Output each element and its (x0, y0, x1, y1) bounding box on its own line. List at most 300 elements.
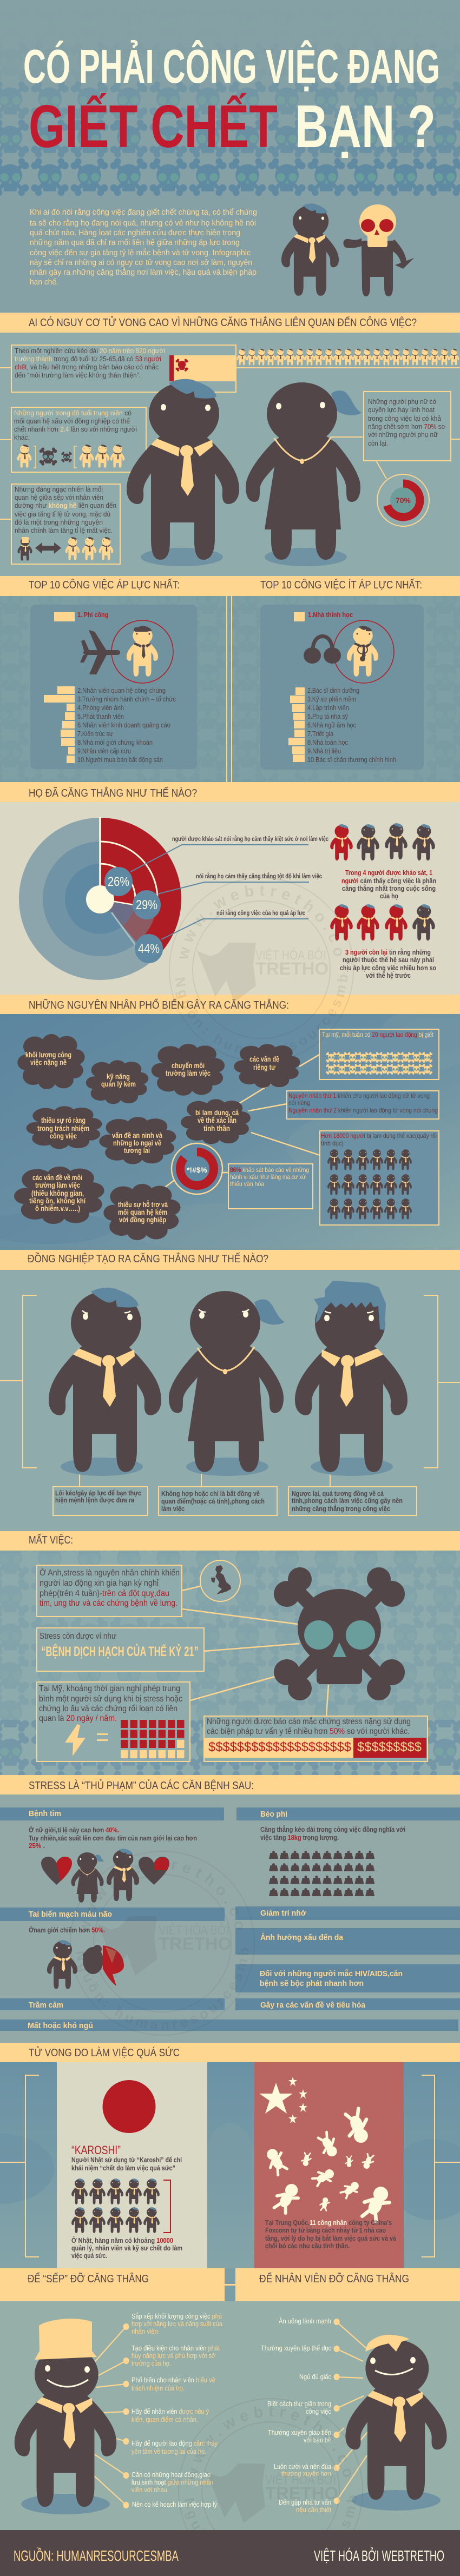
intro text: công việc đến sự gia tăng tỷ lệ mắc bệnh và tử vong. Infographic (30, 248, 251, 257)
figure: woman (246, 382, 362, 560)
disease: heart: 25% . (29, 1842, 45, 1850)
bars and list: least stressful: 5.Phụ tá nha sỹ (307, 712, 348, 720)
box: similarity: Ngược lại, quá tương đồng về cá (292, 1490, 384, 1498)
figure: boss (15, 2319, 116, 2507)
box: plague of the 21st century: Stress còn được ví như (40, 1632, 116, 1641)
box: 86%: thiếu văn hóa (230, 1180, 264, 1188)
tips for employees: thường xuyên hơn (281, 2469, 331, 2478)
disease: skin: Ảnh hưởng xấu đến da (260, 1933, 344, 1942)
watermark stamp 2 (70, 1851, 255, 2036)
bars and list: least stressful: 4.Lập trình viên (307, 704, 349, 712)
figure: office worker (281, 203, 339, 296)
bars and list: least stressful: 10.Bác sĩ chấn thương chỉnh hình (307, 756, 396, 764)
disease: heart (0, 1807, 224, 1903)
box: disagreement (159, 1487, 277, 1515)
heading band: diseases: STRESS LÀ “THỦ PHẠM” CỦA CÁC CĂN BỆNH SAU: (29, 1779, 254, 1792)
heading band: top 10: TOP 10 CÔNG VIỆC ÁP LỰC NHẤT: (29, 579, 180, 591)
tips for bosses: lưu,sinh hoạt giữa những nhân (132, 2478, 213, 2486)
panel: coworkers (0, 1250, 460, 1531)
panel: Japan karoshi: quản lý, nhân viên và kỹ sư chết do làm (71, 2244, 182, 2252)
intro text: những năm qua đã chỉ ra mối liên hệ giữa những áp lực trong (30, 239, 240, 247)
disease: HIV (235, 1964, 460, 1992)
box: UK: phép(trên 4 tuần)-trên cả đột quỵ,đau (40, 1589, 169, 1598)
bars and list: least stressful: 6.Nhà ngữ âm học (307, 721, 356, 729)
cloud: role clarity: công việc (50, 1132, 77, 1140)
chart: 20 day grid (121, 1720, 184, 1758)
tips for employees: Đến gặp nhà tư vấn (279, 2498, 331, 2506)
shadows (61, 1458, 393, 1476)
footer (0, 2530, 460, 2576)
heading band: causes (0, 995, 460, 1014)
tips for bosses: Phổ biến cho nhân viên hiểu về (132, 2376, 215, 2384)
box: UK (37, 1565, 182, 1617)
tips for employees: Thường xuyên giao tiếp (268, 2428, 331, 2436)
panel: top 10 jobs (0, 576, 460, 782)
callout: middle aged colleagues: chết nhanh hơn 2.4 lần so với những người (14, 426, 137, 433)
intro text: này sẽ chỉ ra những ai có nguy cơ tử vong cao nơi sở làm, nguyên (30, 259, 252, 267)
tips for bosses: trường của họ. (132, 2359, 171, 2367)
panel: Japan karoshi: khái niệm “chết do làm việc quá sức” (71, 2164, 175, 2172)
bars and list: stressful: 4.Phóng viên ảnh (77, 704, 124, 712)
tips for employees: nếu cần thiết (296, 2506, 331, 2514)
cloud: poor support (103, 1184, 180, 1240)
cloud: job security: vấn đề an ninh và (112, 1131, 162, 1140)
box: leading cause: Nguyên nhân thứ 1 khiến cho người lao động nữ tử vong (288, 1092, 430, 1100)
panel: Japan karoshi: Ở Nhật, hàng năm có khoảng 10000 (71, 2236, 173, 2244)
callout: boss relation (11, 484, 120, 564)
stat: 29%: 29% (136, 898, 157, 912)
callout: women with power: quyền lực hay linh hoạt (368, 406, 435, 414)
figure: similar coworker (295, 1281, 408, 1472)
box: US leave: bình một người sử dụng khi bị stress hoặc (39, 1694, 182, 1704)
bars and list: stressful: 10.Người mua bán bất động sản (77, 756, 163, 764)
tips for bosses: huy năng lực và phù hợp với sở (132, 2352, 215, 2360)
box: plague of the 21st century (37, 1628, 204, 1671)
cloud: environment problems: tiếng ồn, không khí (29, 1197, 86, 1205)
panel: China Foxconn (254, 2062, 404, 2268)
intro text: nhân gây ra những căng thẳng nơi làm việc, hậu quả và biện pháp (30, 267, 257, 277)
text: 3 of 4: với thế hệ trước (366, 971, 411, 979)
cloud: abuse: tinh thần (203, 1124, 230, 1133)
disease: insomnia: Mất hoặc khó ngủ (28, 2021, 93, 2030)
panel: most stressful jobs (30, 605, 197, 769)
bars and list: stressful: 6.Nhân viên kinh doanh quảng cáo (77, 721, 170, 729)
heading: employees: ĐỂ NHÂN VIÊN ĐỠ CĂNG THẲNG (259, 2272, 409, 2285)
bars and list: stressful: 7.Kiến trúc sư (77, 730, 113, 738)
cloud: job security (99, 1117, 176, 1164)
callout: 20 year study: Theo một nghiên cứu kéo dài 20 năm trên 820 người (15, 347, 165, 355)
callout: women with power: với những người phụ nữ (368, 431, 438, 439)
cloud: personal issues (234, 1044, 300, 1088)
chart labels: nói rằng công việc của họ quá áp lực (216, 910, 305, 917)
figures: 1 of 4 (330, 823, 435, 860)
box: similarity: những căng thẳng trong công việc (292, 1505, 390, 1513)
panel: least stressful jobs: 1.Nhà thính học (308, 611, 353, 619)
box: medical costs: Những người được báo cáo mắc chứng stress nặng sử dụng (207, 1717, 411, 1726)
heading band: how stressed: HỌ ĐÃ CĂNG THẲNG NHƯ THẾ NÀO? (29, 786, 197, 799)
chart labels (172, 836, 328, 917)
chart labels: người được khảo sát nói rằng họ cảm thấy kiệt sức ở nơi làm việc (172, 836, 328, 843)
panel: stress related diseases (0, 1775, 460, 2043)
heading band: job loss: MẤT VIỆC: (29, 1534, 73, 1546)
disease: digestion (235, 1998, 460, 2010)
panel: Japan karoshi (57, 2062, 207, 2268)
disease: stroke (0, 1908, 225, 1989)
heading band: top 10: TOP 10 CÔNG VIỆC ÍT ÁP LỰC NHẤT: (260, 579, 422, 591)
tips for bosses: Hãy để nhân viên được nêu ý (132, 2407, 209, 2415)
disease: obesity (236, 1807, 460, 1896)
watermark stamp 3: VIỆT HÓA BỞI (265, 2472, 336, 2487)
box: pressure (53, 1487, 148, 1515)
tips for bosses: trách nhiệm của họ. (132, 2384, 185, 2392)
callout: women with power: năng chết sớm hơn 70% so (368, 423, 445, 431)
callout: boss relation: đó là một trong những nguyên (15, 519, 103, 526)
watermark stamp 1: www.webtretho.com (180, 885, 342, 958)
box: leading cause: Nguyên nhân thứ 2 khiến người lao động tử vong nói chung (288, 1107, 438, 1114)
figures: 3 of 4 (330, 904, 435, 941)
cloud: management: kỹ năng (107, 1072, 130, 1081)
panel: Japan karoshi: “KAROSHI” (71, 2143, 121, 2157)
watermark stamp 1: Nguồn: humanresourcesmba (175, 975, 347, 1056)
box: 18000 assaulted (320, 1131, 439, 1225)
watermark stamp 2: www.webtretho.com (80, 1859, 243, 1932)
box: medical costs: $$$$$$$$$$$$$$$$$$$$ (208, 1740, 351, 1754)
icon: brain (83, 1945, 124, 1986)
icon: UK map (200, 1560, 240, 1601)
icon: flag stars (259, 2077, 307, 2123)
callout: 20 year study: trưởng thành trong độ tuổi từ 25-65,đã có 53 người (15, 355, 161, 363)
panel: common causes (0, 995, 460, 1252)
donut: 86% (172, 1143, 222, 1194)
disease: skin (235, 1928, 460, 1955)
bars and list: least stressful: 3.Kỹ sư phần mềm (307, 695, 356, 703)
intro text: Khi ai đó nói rằng công việc đang giết chết chúng ta, có thể chúng (30, 208, 257, 217)
icon: audiologist (347, 626, 378, 677)
panel: most stressful jobs: 1. Phi công (77, 611, 108, 619)
callout: middle aged colleagues: mối quan hệ xấu với đồng nghiệp có thể (14, 418, 130, 425)
panel: Japan karoshi: Người Nhật sử dụng từ “Karoshi” để chỉ (71, 2156, 182, 2164)
box: disagreement: quan điểm(hoặc cá tính),phong cách (161, 1498, 265, 1505)
donut: 86%: *!#$% (187, 1166, 208, 1174)
bars and list: least stressful (288, 686, 396, 764)
tips for bosses: viên với nhau. (132, 2486, 169, 2494)
watermark stamp 2: VIỆT HÓA BỞI (159, 1922, 229, 1938)
text: 3 of 4: 3 người còn lại tin rằng những (345, 948, 431, 956)
tips for bosses: Sắp xếp khối lượng công việc phù (132, 2312, 222, 2320)
box: 86%: hành vi xấu như lăng mạ,cư xử (230, 1173, 306, 1181)
stat: 26% (104, 867, 133, 896)
intro text: hạn chế. (30, 278, 58, 287)
heading band: coworkers: ĐỒNG NGHIỆP TẠO RA CĂNG THẲNG NHƯ THẾ NÀO? (28, 1252, 268, 1265)
panel: China Foxconn: Tại Trung Quốc,11 công nhân công ty China's (265, 2219, 392, 2227)
cloud: job security: tương lai (124, 1147, 150, 1155)
bars and list: least stressful: 8.Nhà toán học (307, 738, 348, 746)
cloud: role clarity: trong trách nhiệm (37, 1124, 89, 1133)
watermark stamp 3: www.webtretho.com (188, 2406, 351, 2479)
bars and list: least stressful: 7.Triết gia (307, 730, 334, 738)
figure: happy employee (345, 2335, 447, 2500)
watermark stamp 1: VIỆT HÓA BỞI (255, 947, 326, 963)
box: US leave: chứng lo âu và các chứng rối loạn có liên (39, 1704, 178, 1713)
heading: boss (0, 2268, 225, 2301)
cloud: personal issues: riêng tư (253, 1063, 275, 1071)
box: 86%: 86% khảo sát báo cáo về những (230, 1166, 309, 1174)
icon: heart male (139, 1857, 169, 1885)
heading band: how stressed (0, 782, 460, 802)
box: pressure: hiện mệnh lệnh được đưa ra (55, 1496, 135, 1504)
watermark stamp 2: Nguồn: humanresourcesmba (76, 1948, 249, 2030)
cloud: abuse: bị lạm dụng, cả (195, 1109, 239, 1117)
panel: least stressful jobs (260, 605, 424, 770)
disease: obesity: Căng thẳng kéo dài trong công việc đồng nghĩa với (260, 1825, 405, 1833)
donut: 70% (377, 474, 429, 526)
callout: 20 year study: chết, và hầu hết trong những bản báo cáo có nhắc (15, 363, 159, 371)
cloud: environment problems: (thiếu không gian, (31, 1189, 84, 1197)
callout: boss relation: việc gia tăng tỉ lệ tử vong, mặc dù (15, 511, 110, 518)
box: medical costs: các biện pháp tư vấn y tế nhiều hơn 50% so với người khác. (207, 1727, 410, 1736)
box: similarity: tính,phong cách làm việc cũng gây nên (292, 1497, 403, 1505)
cloud: changing environment: chuyển môi (172, 1062, 205, 1070)
chart labels: nói rằng họ cảm thấy căng thẳng tột độ khi làm việc (196, 873, 322, 880)
box: US leave (37, 1682, 190, 1762)
callout: women with power (364, 392, 451, 461)
cloud: environment problems: trường làm việc (35, 1181, 80, 1189)
callout: boss relation: dường như không hề liên quan đến (15, 502, 116, 509)
box: disagreement: Không hợp hoặc chỉ là bất đồng về (161, 1490, 260, 1498)
tips for employees: Ngủ đủ giấc (299, 2373, 331, 2381)
figure: disagreeing coworker (169, 1291, 285, 1472)
text: 1 of 4: người cảm thấy công việc là phần (341, 877, 436, 885)
callout: middle aged colleagues (11, 407, 146, 472)
heading band: overwork: TỬ VONG DO LÀM VIỆC QUÁ SỨC (29, 2046, 180, 2059)
bars and list: stressful: 5.Phát thanh viên (77, 712, 124, 720)
disease: obesity: Béo phì (260, 1810, 287, 1819)
icon: headphones (304, 636, 341, 664)
tips for bosses: Nên có kế hoạch làm việc hợp lý. (132, 2500, 219, 2508)
disease: heart: Tuy nhiên,xác suất lên cơn đau tim của nam giới lại cao hơn (29, 1834, 197, 1842)
bars and list: least stressful: 2.Bác sĩ dinh dưỡng (307, 686, 359, 694)
radial chart (19, 817, 181, 980)
cloud: changing environment (152, 1044, 225, 1096)
box: medical costs: $$$$$$$$$ (357, 1740, 422, 1754)
tips for employees: với bạn bè (304, 2436, 331, 2444)
cloud: role clarity (26, 1106, 102, 1149)
panel: relieving stress (0, 2268, 460, 2530)
heading: boss: ĐỂ “SẾP” ĐỠ CĂNG THẲNG (28, 2272, 149, 2285)
shadows (21, 2490, 441, 2514)
callout: boss relation: quan hệ giữa sếp với nhân viên (15, 494, 103, 501)
callout: women with power: còn lại. (368, 440, 388, 447)
icon: falling people (262, 2107, 394, 2224)
panel: China Foxconn: Foxconn tự tử bằng cách nhảy từ 1 nhà cao (265, 2226, 386, 2234)
tips for bosses: kiến, quan điểm cá nhân. (132, 2415, 198, 2423)
cloud: poor support: thiếu sự hỗ trợ và (118, 1201, 168, 1209)
callout: 20 year study (11, 345, 236, 392)
heading band: who is at risk (0, 313, 460, 333)
disease: depression (0, 1998, 225, 2010)
tips for bosses: Cần có những hoạt động,giao (132, 2471, 211, 2479)
people row (237, 349, 459, 365)
figure: skull reaper with knife (343, 204, 414, 296)
cloud: management (86, 1060, 148, 1104)
box: leading cause (287, 1091, 439, 1119)
panel: China Foxconn: chối bỏ các nhu cầu tinh thần. (265, 2242, 350, 2250)
stat: 29% (133, 890, 161, 919)
box: medical costs (204, 1716, 428, 1762)
callout: boss relation: nhân chính làm tăng tỉ lệ mất việc. (15, 527, 113, 534)
cloud: abuse: về thể xác lẫn (198, 1116, 236, 1124)
bars and list: stressful: 3.Trưởng nhóm hành chính – tổ chức (77, 695, 176, 703)
cloud: poor support: với đồng nghiệp (119, 1216, 166, 1224)
cloud: management: quản lý kém (101, 1080, 136, 1088)
watermark stamp 2: TRETHO (159, 1934, 232, 1953)
disease: HIV: bệnh sẽ bộc phát nhanh hơn (260, 1979, 364, 1988)
footer: NGUỒN: HUMANRESOURCESMBA (14, 2547, 179, 2564)
cloud: workload: việc nặng nề (30, 1058, 67, 1067)
bars and list: stressful: 8.Nhà môi giới chứng khoán (77, 738, 153, 746)
cloud: workload: khối lượng công (25, 1051, 71, 1059)
callout lines (130, 845, 309, 939)
disease: stroke: Ởnam giới chiếm hơn 50%. (29, 1926, 105, 1934)
box: US leave: Tại Mỹ, khoảng thời gian nghỉ phép trung (39, 1684, 180, 1693)
cloud: environment problems: các vấn đề về môi (32, 1174, 82, 1182)
callout: women with power: Những người phụ nữ có (368, 398, 436, 406)
panel: China Foxconn: tầng, với lý do họ bị bắt làm việc quá sức và và (265, 2234, 397, 2242)
panel: job loss (0, 1531, 460, 1775)
shadows (141, 548, 347, 566)
icon: heart female (41, 1857, 72, 1885)
tips for bosses: Hãy để người lao động cảm thấy (132, 2439, 218, 2447)
icon: plane (80, 630, 120, 674)
heading band: overwork (0, 2043, 460, 2062)
tips for employees: Biết cách thư giãn trong (267, 2400, 331, 2408)
disease: digestion: Gây ra các vấn đề về tiêu hóa (260, 2001, 366, 2010)
disease: depression: Trầm cảm (29, 2001, 63, 2010)
tips for bosses: nhân viên. (132, 2327, 160, 2335)
stat: 44% (135, 934, 163, 963)
disease: obesity: việc tăng 18kg trọng lượng. (260, 1833, 339, 1842)
intro text (30, 208, 257, 287)
callout: middle aged colleagues: Những người trong độ tuổi trung niên có (14, 409, 132, 417)
cloud: role clarity: thiếu sự rõ ràng (41, 1116, 86, 1124)
box: US leave: quan là 20 ngày / năm. (39, 1714, 117, 1723)
figure: pressuring coworker (49, 1288, 161, 1472)
callout: boss relation: Nhưng đáng ngạc nhiên là mối (15, 486, 103, 493)
disease: insomnia (0, 2019, 458, 2031)
box: UK: người lao động xin gia hạn kỳ nghỉ (40, 1579, 159, 1588)
disease: memory: Giảm trí nhớ (260, 1909, 306, 1918)
heading band: diseases (0, 1775, 460, 1794)
box: killed each week (319, 1029, 439, 1080)
text: 3 of 4 (340, 948, 436, 979)
box: similarity (288, 1487, 417, 1515)
tips for bosses: Tạo điều kiện cho nhân viên phát (132, 2344, 220, 2352)
background: hero (0, 0, 460, 313)
cloud: job security: những lo ngại về (113, 1139, 161, 1147)
text: 1 of 4: của họ (380, 892, 398, 900)
tips for bosses: hợp với năng lực và năng suất của (132, 2320, 223, 2328)
heading: employees (235, 2268, 460, 2301)
cloud: environment problems (14, 1167, 104, 1224)
box: pressure: Lôi kéo/gây áp lực để bạn thực (55, 1489, 141, 1497)
tips for employees: Thường xuyên tập thể dục (261, 2344, 331, 2352)
box: killed each week: Tại mỹ, mỗi tuần có 20 người lao động bị giết (322, 1030, 434, 1038)
watermark stamp 1: TRETHO (255, 959, 328, 978)
watermark stamp 3 (178, 2398, 363, 2564)
heading band: job loss (0, 1531, 460, 1551)
intro text: quá chút nào. Hàng loạt các nghiên cứu được thực hiện trong (30, 229, 240, 237)
text: 1 of 4 (341, 869, 436, 900)
callout: women with power: trong công việc lại có khả (368, 415, 441, 422)
disease: stroke: Tai biến mạch máu não (29, 1910, 112, 1919)
skull pattern: hero (0, 4, 460, 196)
callout: middle aged colleagues: khác. (14, 434, 30, 441)
cloud: workload (17, 1034, 85, 1089)
tips for employees: Luôn cười và nên đùa (274, 2462, 332, 2471)
disease: heart: Bệnh tim (29, 1809, 61, 1818)
box: 18000 assaulted: tình dục) (321, 1140, 344, 1147)
stat: 26%: 26% (108, 875, 129, 889)
bars and list: stressful (44, 686, 176, 764)
panel: how stressed (0, 782, 460, 995)
figure: man (127, 379, 239, 560)
cloud: personal issues: các vấn đề (249, 1055, 279, 1063)
watermark stamp 1 (169, 877, 354, 1062)
title: GIẾT CHẾT (29, 93, 278, 160)
heading band: coworkers (0, 1250, 460, 1270)
box: leading cause: nói riêng (288, 1099, 310, 1107)
text: 1 of 4: Trong 4 người được khảo sát, 1 (345, 869, 432, 877)
text: 3 of 4: người thuộc thế hệ sau này phải (343, 956, 434, 964)
icon: pilot (127, 626, 158, 677)
intro text: ta sẽ cho rằng họ đang nói quá, nhưng có vẻ như họ không hề nói (30, 218, 256, 228)
heading band: top 10 (0, 576, 460, 596)
stat: 44%: 44% (138, 942, 160, 956)
box: 86% (228, 1164, 313, 1209)
cloud: poor support: mối quan hệ kém (118, 1208, 167, 1216)
box: UK: tim, ung thư và các chứng bệnh về lưng. (40, 1599, 178, 1608)
callout: 20 year study: đến “môi trường làm việc không thân thiện”. (15, 372, 141, 379)
cloud: abuse (181, 1099, 251, 1144)
disease: heart: Ở nữ giới,tỉ lệ này cao hơn 40%. (29, 1826, 119, 1834)
cloud: environment problems: ô nhiễm.v.v…..) (35, 1204, 80, 1213)
tips for employees: công việc (306, 2407, 331, 2415)
cloud: changing environment: trường làm việc (166, 1069, 211, 1077)
panel: who is at risk (0, 313, 460, 576)
box: disagreement: làm việc (161, 1505, 185, 1513)
tips for employees: Ăn uống lành mạnh (279, 2317, 331, 2325)
bars and list: stressful: 9.Nhân viên cấp cứu (77, 747, 131, 755)
tips for bosses: yên tâm về tương lai của họ. (132, 2447, 206, 2455)
text: 3 of 4: chịu áp lực công việc nhiều hơn so (340, 964, 436, 972)
bars and list: stressful: 2.Nhân viên quan hệ công chúng (77, 686, 166, 694)
tips for bosses (123, 2312, 223, 2508)
tips for employees (261, 2317, 340, 2514)
donut: 70%: 70% (396, 496, 411, 505)
heading band: causes: NHỮNG NGUYÊN NHÂN PHỔ BIẾN GÂY RA CĂNG THẲNG: (29, 998, 289, 1011)
title (23, 39, 440, 160)
panel: Japan karoshi: việc quá sức. (71, 2251, 107, 2260)
box: UK: Ở Anh,stress là nguyên nhân chính khiến (40, 1568, 180, 1578)
box: 18000 assaulted: Hơn 18000 người bị lạm dụng thể xác(quấy rối (321, 1132, 437, 1140)
icon: big skull and crossbones (274, 1567, 405, 1700)
text: 1 of 4: căng thẳng nhất trong cuộc sống (342, 884, 436, 892)
box: plague of the 21st century: “BỆNH DỊCH HẠCH CỦA THẾ KỶ 21” (41, 1643, 199, 1659)
bars and list: least stressful: 9.Nhà trị liệu (307, 747, 341, 755)
disease: memory (235, 1906, 460, 1920)
watermark stamp 3: TRETHO (265, 2484, 338, 2503)
disease: HIV: Đối với những người mắc HIV/AIDS,căn (260, 1969, 403, 1978)
